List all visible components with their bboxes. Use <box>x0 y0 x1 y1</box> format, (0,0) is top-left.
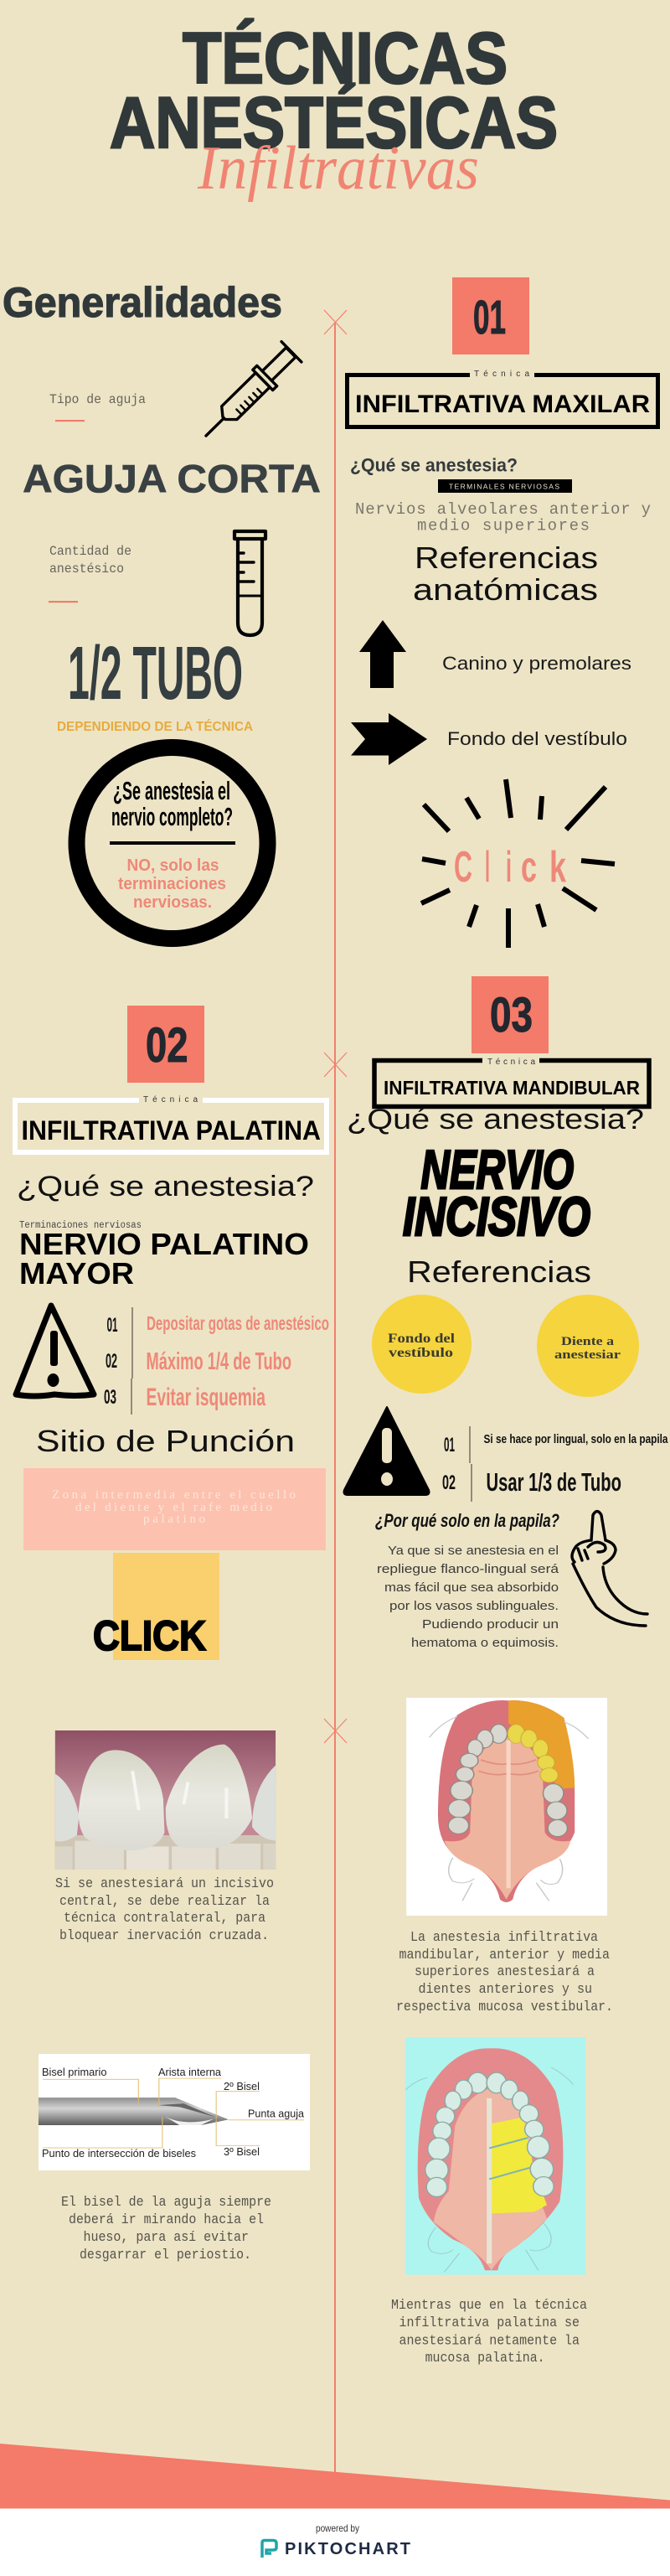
text block: explicación: hematoma o equimosis. <box>411 1636 559 1650</box>
callout: zona intermedia: Zona intermedia entre el cuello <box>52 1488 296 1502</box>
button: click: CLICK <box>93 1612 206 1659</box>
text block: explicación <box>377 1544 559 1650</box>
frame: infiltrativa mandibular: Técnica <box>487 1058 535 1067</box>
callout: zona intermedia: del diente y el rafe medio <box>75 1501 272 1514</box>
diagram: needle bevel: Punto de intersección de biseles <box>42 2148 196 2160</box>
diagram: needle bevel <box>39 2054 310 2170</box>
callout: nervio completo: terminaciones <box>118 875 226 893</box>
steps list: 03 <box>104 1386 116 1409</box>
footer: piktochart: powered by <box>316 2522 359 2534</box>
icon: click burst: C <box>454 843 472 892</box>
steps list <box>104 1307 329 1415</box>
image: palate maxillary anesthesia zone <box>406 1698 607 1916</box>
text: técnica palatina: anestesiará netamente la <box>399 2333 580 2350</box>
circle: fondo del vestíbulo <box>372 1295 472 1394</box>
label: cantidad de anestésico: anestésico <box>49 561 124 577</box>
heading: referencias anatómicas: Referencias <box>415 541 598 575</box>
value: nervio incisivo: NERVIO <box>420 1139 574 1200</box>
diagram: needle bevel: Bisel primario <box>42 2066 107 2078</box>
text block: explicación: Pudiendo producir un <box>422 1617 559 1632</box>
diagram: needle bevel: Arista interna <box>158 2066 221 2078</box>
text: técnica palatina: Mientras que en la técnica <box>391 2298 587 2314</box>
frame: infiltrativa palatina <box>15 1094 327 1152</box>
footer: piktochart: PIKTOCHART <box>285 2540 410 2558</box>
circle: diente a anestesiar: anestesiar <box>554 1348 621 1362</box>
icon: click burst: i <box>506 843 512 892</box>
footer: piktochart <box>0 2509 670 2576</box>
text: incisivo central: bloquear inervación cruzada. <box>59 1928 269 1944</box>
steps list: Evitar isquemia <box>146 1384 265 1411</box>
text: incisivo central: Si se anestesiará un incisivo <box>55 1876 274 1892</box>
callout: nervio completo: NO, solo las <box>127 856 219 875</box>
label: cantidad de anestésico: Cantidad de <box>49 544 131 559</box>
callout: nervio completo: nerviosas. <box>133 893 212 912</box>
callout: zona intermedia <box>23 1468 326 1550</box>
text: infiltrativa mandibular: superiores anestesiará a <box>415 1964 595 1980</box>
text block: explicación: repliegue flanco-lingual será <box>377 1562 559 1576</box>
steps list: 02 <box>106 1350 117 1373</box>
frame: infiltrativa palatina: INFILTRATIVA PALATINA <box>22 1115 321 1146</box>
icon: click burst: k <box>549 843 566 892</box>
frame: infiltrativa maxilar: INFILTRATIVA MAXILAR <box>355 391 650 418</box>
icon: click burst: c <box>521 843 537 892</box>
frame: infiltrativa palatina: Técnica <box>143 1095 198 1104</box>
diagram: needle bevel: 3º Bisel <box>224 2146 260 2158</box>
text: nervios alveolares: medio superiores <box>417 516 590 535</box>
number badge 02 <box>127 1006 204 1083</box>
number badge 03: 03 <box>490 988 533 1042</box>
title: TÉCNICAS <box>183 18 508 99</box>
label: fondo del vestíbulo: Fondo del vestíbulo <box>447 728 627 749</box>
frame: infiltrativa maxilar <box>347 369 658 427</box>
text: bisel de la aguja <box>61 2195 271 2263</box>
text: incisivo central <box>55 1876 274 1944</box>
panel: técnica 01 infiltrativa maxilar <box>347 277 658 948</box>
circle: diente a anestesiar <box>537 1295 639 1397</box>
frame: infiltrativa maxilar: Técnica <box>474 370 529 379</box>
value: nervio incisivo: INCISIVO <box>403 1186 590 1247</box>
value: nervio incisivo <box>403 1139 590 1247</box>
heading: referencias anatómicas: anatómicas <box>413 572 598 607</box>
circle: fondo del vestíbulo: vestíbulo <box>389 1346 453 1360</box>
note: dependiendo de la técnica: DEPENDIENDO DE LA TÉCNICA <box>57 718 253 734</box>
text: incisivo central: técnica contralateral, para <box>64 1911 265 1927</box>
icon: warning solid <box>343 1407 429 1495</box>
heading: por qué solo en la papila: ¿Por qué solo en la papila? <box>375 1510 559 1531</box>
label: cantidad de anestésico <box>49 544 131 577</box>
text: infiltrativa mandibular: dientes anteriores y su <box>419 1982 592 1998</box>
accent dash <box>55 420 85 422</box>
text: técnica palatina <box>391 2298 587 2367</box>
icon: click burst: l <box>485 843 490 892</box>
text: técnica palatina: mucosa palatina. <box>425 2351 545 2367</box>
text: bisel de la aguja: desgarrar el periostio. <box>80 2248 251 2263</box>
notes list: 02 <box>442 1472 456 1494</box>
tag: terminales nerviosas <box>438 479 572 493</box>
text: infiltrativa mandibular: respectiva mucosa vestibular. <box>396 1999 613 2015</box>
circle: diente a anestesiar: Diente a <box>561 1335 615 1348</box>
footer band <box>0 2444 670 2509</box>
icon: syringe <box>196 342 302 446</box>
text block: explicación: Ya que si se anestesia en el <box>388 1544 559 1558</box>
heading: qué se anestesia: ¿Qué se anestesia? <box>350 454 518 476</box>
image: palate palatal anesthesia zone <box>405 2037 585 2275</box>
number badge 03 <box>472 976 549 1053</box>
value: 1/2 tubo: 1/2 TUBO <box>68 632 243 716</box>
label: tipo de aguja: Tipo de aguja <box>49 392 146 407</box>
icon: pointing hand <box>572 1512 647 1626</box>
steps list: Depositar gotas de anestésico <box>147 1312 329 1334</box>
notes list <box>442 1426 668 1502</box>
text block: explicación: por los vasos sublinguales. <box>389 1599 559 1613</box>
small label: terminaciones nerviosas: Terminaciones nerviosas <box>19 1220 142 1231</box>
text: bisel de la aguja: deberá ir mirando hacia el <box>69 2212 264 2228</box>
heading: qué se anestesia: ¿Qué se anestesia? <box>17 1171 314 1203</box>
value: nervio palatino mayor <box>19 1227 309 1291</box>
value: nervio palatino mayor: MAYOR <box>19 1256 134 1291</box>
callout: nervio completo: nervio completo? <box>111 802 233 831</box>
number badge 01: 01 <box>473 291 506 344</box>
value: nervio palatino mayor: NERVIO PALATINO <box>19 1227 309 1261</box>
photo: incisivos centrales <box>55 1730 276 1870</box>
callout: nervio completo <box>77 747 268 939</box>
panel: técnica 02 infiltrativa palatina <box>15 1006 329 1660</box>
text: nervios alveolares <box>355 500 651 535</box>
title: ANESTÉSICAS <box>110 83 558 163</box>
heading: sitio de punción: Sitio de Punción <box>36 1424 295 1458</box>
diagram: needle bevel: Punta aguja <box>248 2108 304 2120</box>
text: incisivo central: central, se debe realizar la <box>59 1894 270 1910</box>
accent dash <box>49 601 78 603</box>
tag: terminales nerviosas: TERMINALES NERVIOSAS <box>449 483 559 491</box>
heading: qué se anestesia: ¿Qué se anestesia? <box>347 1104 644 1135</box>
text: infiltrativa mandibular <box>396 1930 613 2015</box>
frame: infiltrativa mandibular <box>374 1056 649 1106</box>
callout: zona intermedia: palatino <box>143 1513 205 1526</box>
panel: generalidades <box>3 279 321 939</box>
number badge 02: 02 <box>146 1018 188 1073</box>
heading: referencias: Referencias <box>407 1254 591 1289</box>
panel: técnica 03 infiltrativa mandibular <box>343 976 668 1650</box>
text: bisel de la aguja: hueso, para así evitar <box>84 2230 249 2246</box>
text: infiltrativa mandibular: mandibular, anterior y media <box>399 1948 610 1963</box>
number badge 01 <box>452 277 529 354</box>
button: click <box>93 1553 219 1660</box>
text: infiltrativa mandibular: La anestesia infiltrativa <box>410 1930 598 1946</box>
icon: warning outline <box>16 1306 94 1396</box>
heading: generalidades: Generalidades <box>3 279 282 326</box>
text block: explicación: mas fácil que sea absorbido <box>384 1580 559 1595</box>
icon: click burst <box>421 779 615 948</box>
text: bisel de la aguja: El bisel de la aguja siempre <box>61 2195 271 2211</box>
notes list: 01 <box>444 1434 455 1456</box>
frame: infiltrativa mandibular: INFILTRATIVA MANDIBULAR <box>384 1077 640 1099</box>
circle: fondo del vestíbulo: Fondo del <box>388 1332 456 1346</box>
steps list: 01 <box>107 1314 117 1337</box>
steps list: Máximo 1/4 de Tubo <box>146 1348 291 1375</box>
text: nervios alveolares: Nervios alveolares anterior y <box>355 500 651 519</box>
title <box>110 18 558 203</box>
central timeline line <box>324 310 347 2472</box>
title: Infiltrativas <box>197 134 479 203</box>
callout: nervio completo: ¿Se anestesia el <box>113 776 230 805</box>
heading: referencias anatómicas <box>413 541 598 607</box>
diagram: needle bevel: 2º Bisel <box>224 2081 260 2092</box>
text: técnica palatina: infiltrativa palatina se <box>399 2315 580 2331</box>
icon: test tube <box>234 531 265 635</box>
value: aguja corta: AGUJA CORTA <box>23 456 321 501</box>
icon: arrow up <box>359 620 406 688</box>
icon: arrow right <box>351 713 427 765</box>
label: canino y premolares: Canino y premolares <box>442 653 631 674</box>
